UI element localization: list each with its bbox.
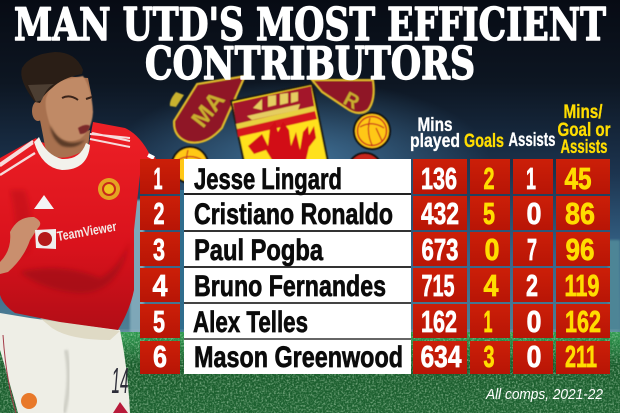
rank column: 5 <box>153 304 165 339</box>
mins played column: 673 <box>422 232 458 267</box>
player names: Alex Telles <box>193 306 308 339</box>
player names: Mason Greenwood <box>194 341 403 374</box>
player names: Bruno Fernandes <box>194 270 386 303</box>
football left <box>172 147 208 183</box>
column headers <box>410 102 611 158</box>
mins played column: 162 <box>421 304 457 339</box>
left ribbon <box>174 76 245 143</box>
club crest on shirt <box>98 178 120 200</box>
hair <box>21 52 83 103</box>
mins per goal or assist column <box>556 159 610 374</box>
assists column: 2 <box>526 268 538 303</box>
player names: Paul Pogba <box>194 234 323 267</box>
column headers: played <box>410 131 460 152</box>
title: CONTRIBUTORS <box>145 38 475 90</box>
goals column <box>470 159 510 374</box>
mins per goal or assist column: 119 <box>564 268 600 303</box>
hand <box>0 217 40 274</box>
football lower right <box>348 153 382 187</box>
assists column: 0 <box>526 304 542 339</box>
mins played column: 634 <box>420 339 462 374</box>
shirt <box>0 122 156 330</box>
goals column: 4 <box>484 268 499 303</box>
Manchester United crest <box>170 76 390 187</box>
player: Jesse Lingard <box>0 52 156 413</box>
source note: All comps, 2021-22 <box>485 386 604 403</box>
shirt folds <box>20 240 130 293</box>
league table <box>140 159 610 374</box>
mins per goal or assist column: 86 <box>565 196 595 231</box>
left ribbon letters: MA <box>186 87 231 133</box>
column headers: Assists <box>508 130 556 151</box>
rank column: 4 <box>152 268 168 303</box>
mins per goal or assist column: 45 <box>564 161 592 196</box>
assists column: 1 <box>526 161 536 196</box>
mins per goal or assist column: 96 <box>566 232 594 267</box>
shoulder stripes left <box>0 141 35 175</box>
goals column: 3 <box>484 339 494 374</box>
red devil <box>248 122 316 160</box>
goals column: 1 <box>484 304 492 339</box>
mins played column: 715 <box>422 268 454 303</box>
mins per goal or assist column: 211 <box>565 339 597 374</box>
TeamViewer sponsor <box>35 219 118 249</box>
goals column: 5 <box>483 196 495 231</box>
rank column: 3 <box>153 232 165 267</box>
assists column <box>513 159 553 374</box>
neck and face <box>38 75 92 158</box>
ship <box>247 92 300 120</box>
rank column: 6 <box>153 339 167 374</box>
title <box>14 0 606 90</box>
assists column: 0 <box>526 196 542 231</box>
TeamViewer sponsor: TeamViewer <box>56 219 118 244</box>
player names: Jesse Lingard <box>194 163 342 196</box>
column headers: Goals <box>464 131 504 152</box>
column headers: Mins <box>418 115 452 136</box>
right ribbon <box>312 80 374 113</box>
ear <box>32 101 44 121</box>
column headers: Mins/ <box>564 102 603 123</box>
shorts crest <box>21 393 37 409</box>
eyes and mouth <box>62 96 92 100</box>
mins played column: 136 <box>421 161 457 196</box>
assists column: 0 <box>526 339 542 374</box>
face <box>46 76 93 141</box>
goals column: 2 <box>484 161 494 196</box>
rank column <box>140 159 180 374</box>
right ribbon letter: R <box>340 88 363 114</box>
assists column: 7 <box>527 232 537 267</box>
mins played column <box>413 159 467 374</box>
mins per goal or assist column: 162 <box>565 304 601 339</box>
player names: Cristiano Ronaldo <box>194 198 393 231</box>
player: Jesse Lingard: 14 <box>112 360 128 401</box>
rank column: 1 <box>154 161 162 196</box>
adidas logo <box>34 195 54 209</box>
mins played column: 432 <box>421 196 459 231</box>
pitch <box>0 332 620 413</box>
collar <box>34 137 90 170</box>
goals column: 0 <box>484 232 500 267</box>
football right <box>354 113 390 149</box>
shoulder stripes right <box>90 133 130 147</box>
player names <box>184 159 411 374</box>
rank column: 2 <box>154 196 164 231</box>
shield <box>231 84 328 162</box>
shorts <box>0 313 130 413</box>
